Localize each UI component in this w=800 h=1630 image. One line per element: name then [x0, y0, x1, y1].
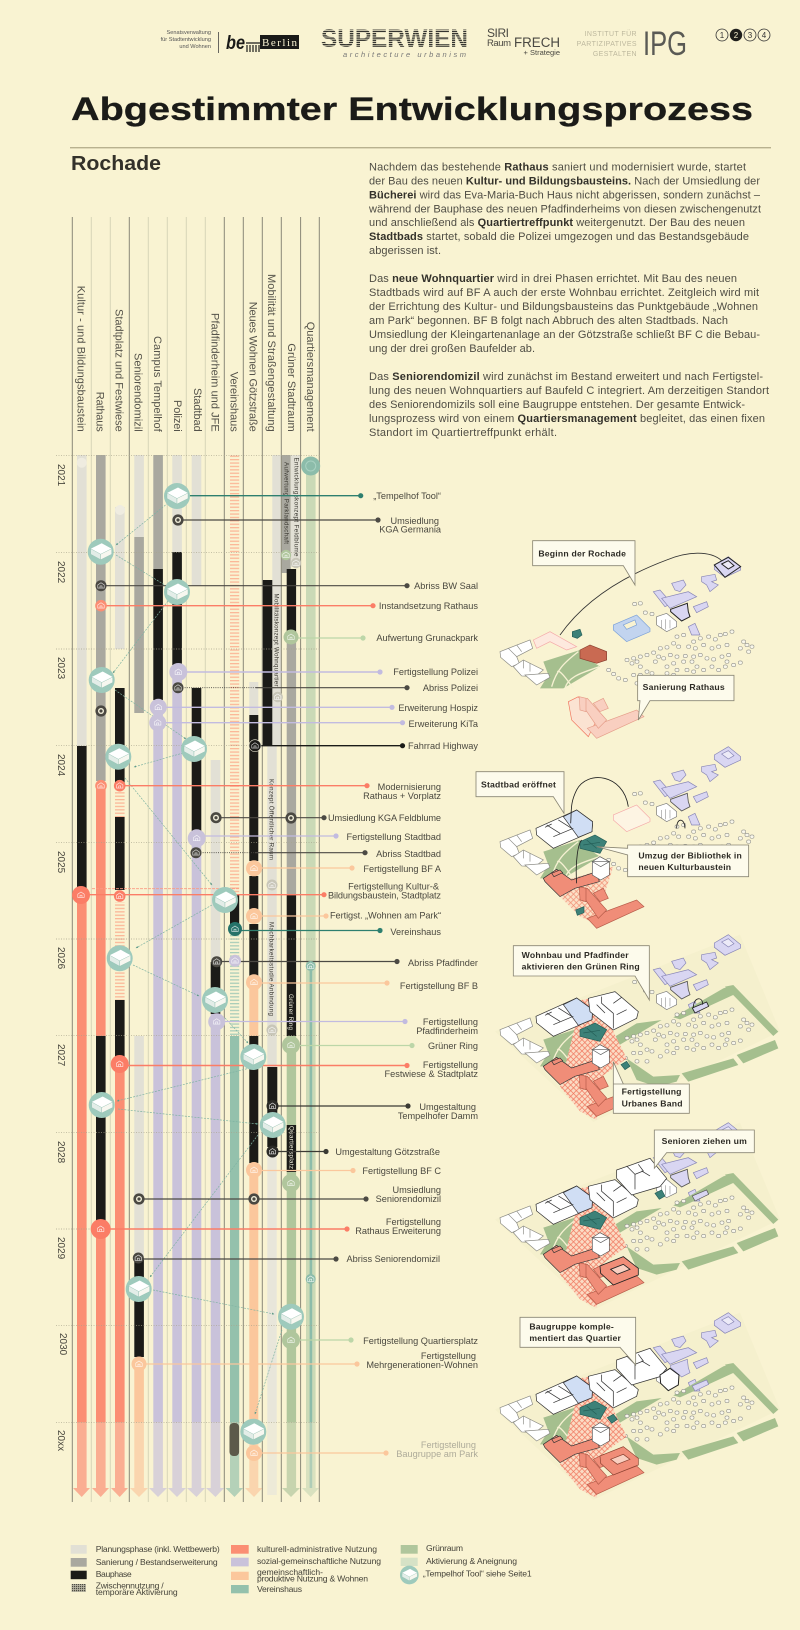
- intro text: Stadtbads startet, sobald die Polizei umgezogen und das Bestandsgebäude: [369, 231, 749, 243]
- column headings: Stadtplatz und Festwiese: [112, 309, 124, 432]
- year labels: 2022: [55, 561, 66, 584]
- milestone: Modernisierung Rathaus + Vorplatz: Modernisierung: [378, 782, 441, 792]
- logo: IPG: [577, 25, 687, 63]
- milestone: Fertigstellung Mehrgenerationen-Wohnen: Mehrgenerationen-Wohnen: [366, 1360, 478, 1370]
- map 2: Stadtbad eröffnet: [476, 747, 752, 928]
- legend column 1: Sanierung / Bestandserweiterung: [96, 1557, 218, 1567]
- milestone: Umsiedlung KGA Feldblume: Umsiedlung KGA Feldblume: [328, 813, 441, 823]
- callout: Baugruppe komplementiert: mentiert das Quartier: [529, 1333, 622, 1343]
- column headings: Stadtbad: [191, 388, 203, 432]
- milestone: Fertigstellung Baugruppe am Park: Baugruppe am Park: [396, 1449, 478, 1459]
- legend column 2: produktive Nutzung & Wohnen: [257, 1574, 368, 1584]
- callout: Sanierung Rathaus: Sanierung Rathaus: [643, 682, 725, 692]
- milestone: Vereinshaus: Vereinshaus: [390, 927, 441, 937]
- logo: IPG: GESTALTEN: [593, 51, 637, 58]
- logo: Senatsverwaltung Berlin: und Wohnen: [179, 44, 211, 50]
- column headings: Vereinshaus: [228, 372, 240, 432]
- milestone: Fertigstellung Festwiese & Stadtplatz: [120, 1060, 478, 1079]
- bar captions: Konzept Öffentlicher Raum: [268, 779, 274, 860]
- milestone: Abriss Stadtbad: Abriss Stadtbad: [376, 849, 441, 859]
- page indicator: 2: [734, 31, 739, 40]
- milestone: Modernisierung Rathaus + Vorplatz: [120, 782, 441, 801]
- bar captions: [268, 458, 300, 1169]
- intro text: ung der drei großen Baufelder ab.: [369, 343, 535, 355]
- milestone: Tempelhof Tool: [177, 491, 441, 501]
- milestone: Fertigstellung BF B: [254, 980, 478, 991]
- milestone: Fertigstellung Festwiese & Stadtplatz: Festwiese & Stadtplatz: [385, 1069, 478, 1079]
- logo: Senatsverwaltung Berlin: Senatsverwaltung: [167, 30, 211, 36]
- intro text: lung des neuen Wohnquartiers auf Baufeld C integriert. Am derzeitigen Standort: [369, 385, 769, 397]
- legend column 3: Aktivierung & Aneignung: [426, 1556, 517, 1566]
- callout: Wohnbau und Pfadfinder: aktivieren den Grünen Ring: [522, 962, 640, 972]
- logo: Superwien: architecture urbanism: [343, 50, 466, 59]
- bar captions: Entwicklungskonzept Feldblume: [292, 458, 300, 557]
- milestone: Fertigstellung Baugruppe am Park: [254, 1440, 478, 1459]
- milestone: Fertigstellung BF C: Fertigstellung BF C: [362, 1166, 441, 1176]
- milestone: Grüner Ring: Grüner Ring: [428, 1041, 478, 1051]
- milestone: Umsiedlung KGA Germania: Umsiedlung: [390, 516, 439, 526]
- milestone: Instandsetzung Rathaus: [101, 601, 478, 611]
- milestone: Fertigstellung Baugruppe am Park: Fertigstellung: [421, 1440, 476, 1450]
- bar: Stadtbad: [187, 455, 205, 1497]
- arc: Stadtbad relocation: [571, 778, 685, 883]
- milestone: Fertigstellung Stadtbad: Fertigstellung Stadtbad: [346, 832, 441, 842]
- milestone: Fertigstellung BF B: Fertigstellung BF B: [400, 981, 478, 991]
- milestone: Fertigstellung Quartiersplatz: [291, 1336, 478, 1346]
- bar: Rathaus: [92, 455, 109, 1497]
- milestone callouts: [81, 491, 479, 1459]
- milestone: Fertigstellung Stadtbad: [197, 832, 441, 842]
- column bars: [73, 455, 319, 1497]
- intro text: Umsiedlung der Kleingartenanlage an der Götzstraße schließt BF C die Bebau-: [369, 329, 760, 341]
- milestone: Umsiedlung Seniorendomizil: Umsiedlung: [392, 1185, 441, 1195]
- milestone: Fertigst. Wohnen am Park: [254, 910, 441, 920]
- map 3: Grüner Ring: [495, 935, 780, 1122]
- bar captions: Mobilitätskonzept Wohnquartier: [272, 594, 280, 686]
- bar: Campus Tempelhof: [149, 455, 167, 1497]
- logo: Siri Raum Frech: [487, 26, 560, 57]
- legend column 2: sozial-gemeinschaftliche Nutzung: [257, 1556, 381, 1566]
- column headings: [74, 274, 316, 433]
- column headings: Quartiersmanagement: [304, 322, 316, 432]
- callout: Umzug der Bibliothek: [597, 845, 749, 877]
- legend column 3: „Tempelhof Tool“ siehe Seite1: [423, 1568, 532, 1578]
- milestone: Abriss Seniorendomizil: Abriss Seniorendomizil: [347, 1254, 440, 1264]
- page indicator: 1: [720, 31, 725, 40]
- milestone: Modernisierung Rathaus + Vorplatz: Rathaus + Vorplatz: [363, 791, 441, 801]
- milestone: Fertigstellung Mehrgenerationen-Wohnen: Fertigstellung: [421, 1351, 476, 1361]
- year labels: 20xx: [55, 1430, 66, 1451]
- milestone: Tempelhof Tool: „Tempelhof Tool“: [373, 491, 441, 501]
- column headings: Campus Tempelhof: [151, 336, 163, 433]
- column headings: Neues Wohnen Götzstraße: [246, 302, 258, 432]
- callout: Fertigstellung Urbanes Band: [613, 1062, 689, 1113]
- Baugruppe cube: [660, 1368, 679, 1391]
- logo: Senatsverwaltung Berlin: [161, 30, 299, 54]
- column headings: Seniorendomizil: [132, 353, 144, 432]
- fade overlay for undated phase: [72, 1422, 320, 1498]
- column headings: Grüner Stadtraum: [285, 343, 297, 432]
- callout: Stadtbad eröffnet: [476, 772, 564, 813]
- bar: Grüner Stadtraum: [282, 455, 301, 1497]
- column headings: Kultur - und Bildungsbaustein: [74, 286, 86, 432]
- callout: Baugruppe komplementiert: [520, 1317, 636, 1365]
- milestone: Erweiterung Hospiz: Erweiterung Hospiz: [398, 703, 478, 713]
- page indicator: 4: [762, 31, 767, 40]
- timeline chart: [55, 217, 479, 1502]
- milestone: Abriss Seniorendomizil: [139, 1254, 440, 1264]
- milestone: Fahrrad Highway: [255, 741, 478, 751]
- column headings: Polizei: [171, 400, 183, 432]
- column headings: Rathaus: [94, 392, 106, 432]
- milestone: Fertigstellung Kultur- & Bildungsbaustein: Fertigstellung Kultur-&: [348, 882, 439, 892]
- intro text: Standort im Quartiertreffpunkt erhält.: [369, 427, 557, 439]
- milestone: Fertigstellung Pfadfinderheim: [217, 1017, 478, 1036]
- milestone: Erweiterung Hospiz: [158, 703, 478, 713]
- milestone: Umsiedlung Seniorendomizil: Seniorendomizil: [376, 1194, 441, 1204]
- bar: Neues Wohnen Götzstraße: [245, 682, 262, 1497]
- milestone: Abriss BW Saal: [101, 581, 478, 591]
- milestone: Fertigstellung Polizei: [178, 667, 478, 677]
- milestone: Grüner Ring: [291, 1041, 478, 1051]
- year labels: 2023: [55, 657, 66, 680]
- intro text: der Errichtung des Kultur- und Bildungsbausteins das Punktgebäude „Wohnen: [369, 301, 758, 313]
- milestone: Abriss Stadtbad: [196, 849, 441, 859]
- milestone: Abriss Pfadfinder: Abriss Pfadfinder: [408, 958, 478, 968]
- legend column 2: gemeinschaftlich-: [257, 1567, 323, 1577]
- legend column 2: kulturell-administrative Nutzung: [257, 1544, 377, 1554]
- intro text: während der Bauphase des neuen Pfadfinderheims von diesen zwischengenutzt: [368, 203, 761, 215]
- milestone: Fertigstellung Mehrgenerationen-Wohnen: [139, 1351, 478, 1370]
- callout: Beginn der Rochade: Beginn der Rochade: [538, 549, 626, 559]
- bar captions: Aufwertung Parklandschaft: [282, 462, 290, 544]
- legend column 2: Vereinshaus: [257, 1584, 302, 1594]
- intro text: und anschließend als Quartiertreffpunkt weitergenutzt. Der Bau des neuen: [369, 217, 745, 229]
- bar captions: Grüner Ring: [287, 994, 294, 1031]
- milestone: Umsiedlung KGA Feldblume: [216, 813, 441, 823]
- legend column 3: [400, 1543, 532, 1584]
- milestone: Instandsetzung Rathaus: Instandsetzung Rathaus: [379, 601, 478, 611]
- milestone: Umgestaltung Tempelhofer Damm: [272, 1102, 478, 1121]
- milestone: Umsiedlung Seniorendomizil: [139, 1185, 441, 1204]
- intro text: [368, 162, 769, 439]
- bar captions: Machbarkeitsstudie Anbindung: [268, 922, 274, 1017]
- legend column 1: Zwischennutzung /: [96, 1580, 164, 1590]
- intro text: der Bau des neuen Kultur- und Bildungsbausteins. Nach der Umsiedlung der: [369, 176, 760, 188]
- callout: Stadtbad eröffnet: Stadtbad eröffnet: [481, 779, 556, 789]
- milestone: Abriss Polizei: Abriss Polizei: [423, 683, 478, 693]
- column headings: Pfadfinderheim und JFE: [208, 313, 220, 432]
- milestone: Fertigstellung Rathaus Erweiterung: Rathaus Erweiterung: [355, 1226, 441, 1236]
- callout: Fertigstellung Urbanes Band: Fertigstellung: [622, 1087, 682, 1097]
- milestone: Umsiedlung KGA Germania: KGA Germania: [379, 524, 442, 534]
- page indicator: 3: [748, 31, 753, 40]
- subtitle: Rochade: [71, 152, 161, 175]
- intro text: am Park“ begonnen. BF B folgt nach Abbruch des alten Stadtbads. Nach: [369, 315, 728, 327]
- callout: Beginn der Rochade: [533, 541, 635, 585]
- column dividers: [72, 217, 319, 1502]
- milestone: Umgestaltung Tempelhofer Damm: Tempelhofer Damm: [398, 1111, 478, 1121]
- bar captions: Quartiersplatz: [288, 1126, 294, 1169]
- title: Abgestimmter Entwicklungsprozess: [71, 91, 753, 127]
- bar: Polizei: [168, 455, 186, 1497]
- map 4: Senioren ziehen um: [495, 1123, 780, 1310]
- logo: Senatsverwaltung Berlin: Berlin: [262, 37, 298, 49]
- milestone: Abriss Pfadfinder: [216, 958, 478, 968]
- senior residence block: [600, 1257, 638, 1285]
- callout: Wohnbau und Pfadfinder: [513, 946, 649, 1000]
- intro text: Bücherei wird das Eva-Maria-Buch Haus nicht abgerissen, sondern zunächst –: [369, 189, 761, 201]
- milestone: Fertigstellung Kultur- & Bildungsbaustein: [81, 882, 441, 900]
- milestone: Fertigstellung Polizei: Fertigstellung Polizei: [393, 667, 478, 677]
- callout: Senioren ziehen um: Senioren ziehen um: [662, 1136, 747, 1146]
- year labels: 2027: [55, 1044, 66, 1067]
- milestone: Vereinshaus: [235, 927, 441, 937]
- milestone: Umgestaltung Götzstraße: [272, 1147, 440, 1157]
- logo: Siri Raum Frech: SIRI: [487, 26, 509, 40]
- milestone: Fertigstellung BF C: [254, 1166, 441, 1176]
- logo: Siri Raum Frech: Raum: [487, 38, 511, 49]
- intro text: Nachdem das bestehende Rathaus saniert und modernisiert wurde, startet: [369, 162, 746, 174]
- milestone: Umgestaltung Tempelhofer Damm: Umgestaltung: [419, 1102, 476, 1112]
- callout: Sanierung Rathaus: [638, 675, 734, 720]
- legend column 1: Planungsphase (inkl. Wettbewerb): [96, 1544, 220, 1554]
- milestone: Fertigstellung Festwiese & Stadtplatz: Fertigstellung: [423, 1060, 478, 1070]
- bar: Mobilität und Straßengestaltung: [263, 455, 281, 1495]
- callout: Baugruppe komplementiert: Baugruppe komple-: [529, 1321, 614, 1331]
- legend column 1: Bauphase: [96, 1569, 132, 1579]
- year labels: 2028: [55, 1141, 66, 1164]
- callout: Umzug der Bibliothek: neuen Kulturbaustein: [638, 862, 731, 872]
- milestone: Aufwertung Grunackpark: Aufwertung Grunackpark: [376, 633, 478, 643]
- callout: Senioren ziehen um: [654, 1130, 754, 1168]
- milestone: Fahrrad Highway: Fahrrad Highway: [408, 741, 478, 751]
- bar: Pfadfinderheim und JFE: [206, 760, 224, 1497]
- intro text: des Seniorendomizils soll eine Baugruppe entstehen. Der gesamte Entwick-: [369, 399, 745, 411]
- logo: Siri Raum Frech: + Strategie: [524, 48, 560, 57]
- intro text: Das neue Wohnquartier wird in drei Phasen errichtet. Mit Bau des neuen: [369, 273, 737, 285]
- year labels: 2024: [55, 754, 66, 777]
- milestone: Umgestaltung Götzstraße: Umgestaltung Götzstraße: [335, 1147, 440, 1157]
- year grid lines: [56, 455, 320, 1422]
- milestone: Erweiterung KiTa: Erweiterung KiTa: [409, 719, 479, 729]
- Tempelhof Tool markers: [88, 483, 304, 1445]
- year labels: 2021: [55, 464, 66, 487]
- bar: Stadtplatz und Festwiese: [111, 507, 128, 1497]
- callout: Fertigstellung Urbanes Band: Urbanes Band: [622, 1098, 683, 1108]
- milestone: Erweiterung KiTa: [158, 719, 479, 729]
- milestone: Fertigst. Wohnen am Park: Fertigst. „Wohnen am Park“: [330, 910, 441, 920]
- milestone: Fertigstellung BF A: Fertigstellung BF A: [363, 864, 442, 874]
- map 1: Beginn der Rochade: [500, 541, 752, 738]
- milestone: Abriss Polizei: [178, 683, 478, 693]
- milestone: Fertigstellung Kultur- & Bildungsbaustein: Bildungsbaustein, Stadtplatz: [328, 890, 441, 900]
- logo: IPG: PARTIZIPATIVES: [577, 41, 637, 48]
- arc: move to new site: [560, 553, 722, 635]
- year labels: 2029: [55, 1237, 66, 1260]
- legend column 1: temporäre Aktivierung: [96, 1587, 178, 1597]
- bar: Quartiersmanagement: [302, 466, 319, 1497]
- legend column 1: [71, 1544, 220, 1597]
- logo: Superwien: SUPERWIEN: [321, 25, 468, 53]
- column headings: Mobilität und Straßengestaltung: [265, 274, 277, 432]
- year labels: [55, 464, 68, 1451]
- logo: Siri Raum Frech: FRECH: [514, 35, 560, 50]
- callout: Umzug der Bibliothek: Umzug der Bibliothek in: [638, 850, 742, 860]
- logo: Senatsverwaltung Berlin: für Stadtentwicklung: [161, 37, 211, 43]
- milestone: Fertigstellung Rathaus Erweiterung: Fertigstellung: [386, 1217, 441, 1227]
- milestone: Fertigstellung Rathaus Erweiterung: [101, 1217, 441, 1236]
- milestone: Aufwertung Grunackpark: [291, 633, 478, 643]
- milestone: Umsiedlung KGA Germania: [178, 516, 442, 534]
- status icons on bars: [72, 456, 320, 1461]
- legend column 3: Grünraum: [426, 1543, 463, 1553]
- logos row: [161, 25, 770, 63]
- legend column 2: [231, 1544, 381, 1594]
- map 5: Baugruppe: [495, 1313, 780, 1500]
- bar: Seniorendomizil: [130, 455, 148, 1497]
- intro text: Stadtbads wird auf BF A auch der erste Wohnbau errichtet. Zeitgleich wird mit: [369, 287, 759, 299]
- logo: Senatsverwaltung Berlin: be: [226, 33, 245, 54]
- logo: IPG: IPG: [643, 25, 687, 63]
- year labels: 2025: [55, 851, 66, 874]
- milestone: Fertigstellung Pfadfinderheim: Pfadfinderheim: [416, 1026, 478, 1036]
- milestone: Fertigstellung Pfadfinderheim: Fertigstellung: [423, 1017, 478, 1027]
- bar: Kultur- und Bildungsbaustein: [73, 455, 90, 1497]
- year labels: 2030: [57, 1333, 68, 1356]
- intro text: abgerissen ist.: [369, 245, 441, 257]
- milestone: Fertigstellung Quartiersplatz: Fertigstellung Quartiersplatz: [363, 1336, 478, 1346]
- callout: Wohnbau und Pfadfinder: Wohnbau und Pfadfinder: [522, 950, 629, 960]
- year labels: 2026: [55, 947, 66, 970]
- bar: Vereinshaus: [226, 455, 243, 1497]
- milestone: Abriss BW Saal: Abriss BW Saal: [414, 581, 478, 591]
- intro text: lungsprozess wird von einem Quartiersmanagement begleitet, das einen fixen: [369, 413, 765, 425]
- intro text: Das Seniorendomizil wird zunächst im Bestand erweitert und nach Fertigstel-: [369, 371, 763, 383]
- logo: IPG: INSTITUT FÜR: [584, 30, 637, 38]
- page indicator: [716, 29, 770, 41]
- legend: [71, 1543, 532, 1597]
- dashed process arrows: [113, 503, 282, 1414]
- milestone: Fertigstellung BF A: [254, 864, 442, 874]
